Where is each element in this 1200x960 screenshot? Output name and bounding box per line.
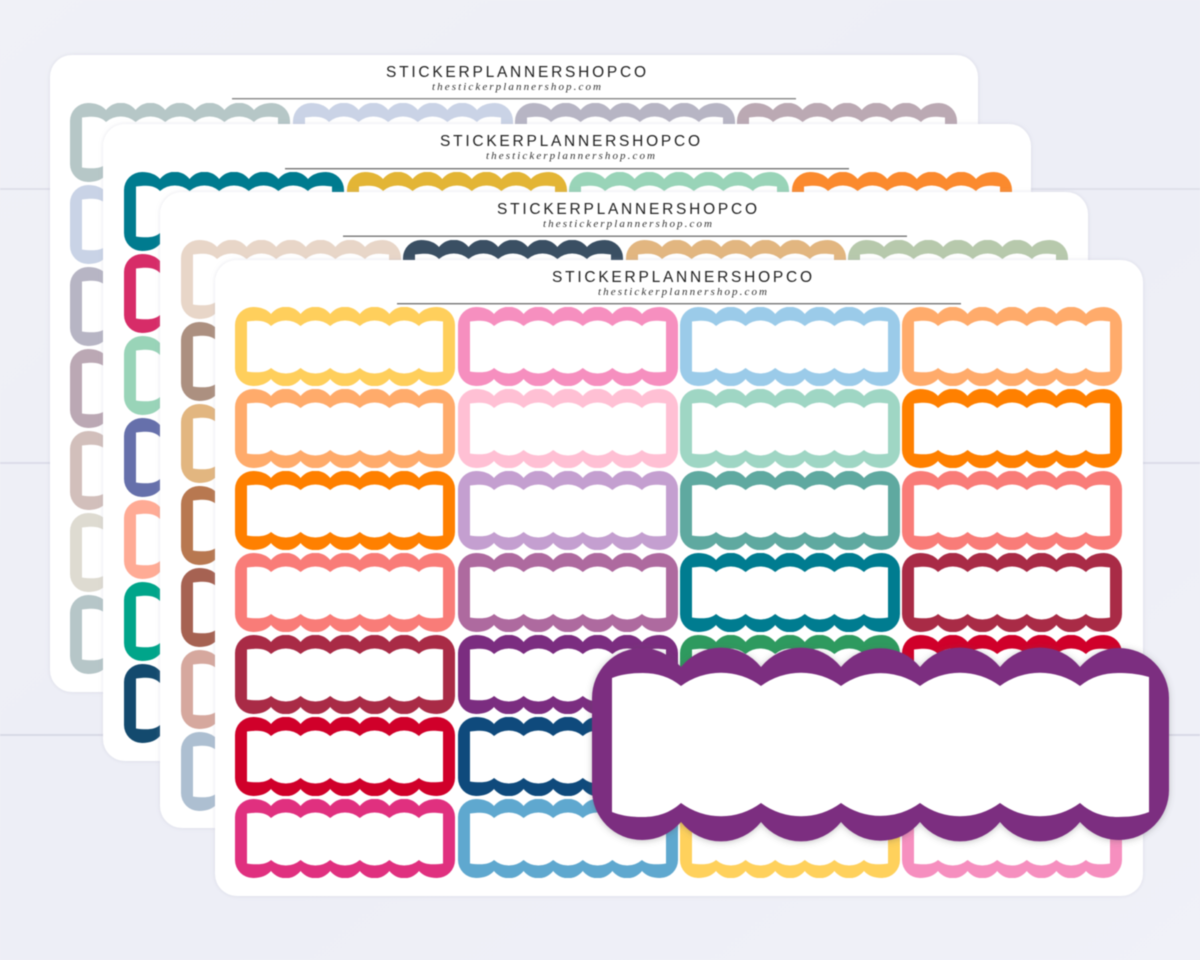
enlarged purple scalloped sticker [592, 648, 1169, 841]
sheet 4: front sheet [215, 260, 1143, 896]
sheet 3 heading: STICKERPLANNERSHOPCO [497, 201, 757, 218]
sheet 2: bright stickers [103, 124, 1031, 761]
sheet 1 divider [232, 98, 796, 99]
sheet 4 website: thestickerplannershop.com [598, 286, 767, 298]
sheet 2 stickers [124, 172, 1012, 743]
sheet 1 stickers [70, 103, 957, 674]
sheet 2 heading: STICKERPLANNERSHOPCO [440, 133, 700, 150]
sheet 3: earthy stickers [160, 192, 1088, 828]
sheet 1 heading: STICKERPLANNERSHOPCO [386, 64, 646, 81]
sheet 3 stickers [181, 240, 1068, 811]
sheet 2 divider [285, 168, 849, 169]
sheet 4 divider [397, 303, 961, 304]
sheet 1: muted pastel stickers [50, 55, 978, 692]
sheet 2 website: thestickerplannershop.com [486, 150, 655, 162]
sheet 4 sticker grid [235, 307, 1122, 878]
sheet 4 heading: STICKERPLANNERSHOPCO [552, 269, 812, 286]
sheet 3 website: thestickerplannershop.com [543, 218, 712, 230]
sheet 1 website: thestickerplannershop.com [432, 81, 601, 93]
sheet 3 divider [343, 236, 907, 237]
